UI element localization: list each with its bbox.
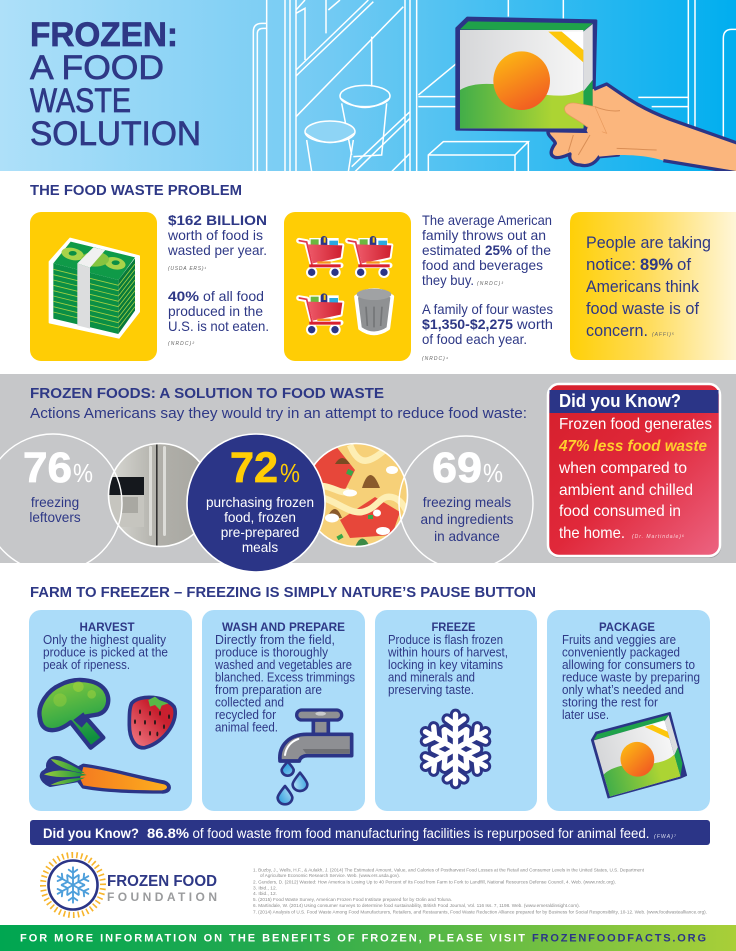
heading: farm to freezer: FARM TO FREEZER – FREEZING IS SIMPLY NATURE’S PAUSE BUTTON <box>30 585 536 601</box>
panel: wash and prepare: WASH AND PREPARE <box>222 620 345 634</box>
icon: stack of money <box>49 238 139 338</box>
text block: 162 billion: 40% <box>168 289 199 304</box>
text block: average American family <box>422 213 553 362</box>
panel: people are taking notice: Americans think <box>586 278 700 296</box>
stat: 69 percent: and ingredients <box>421 512 514 527</box>
footnotes: 5. (2015) Food Waste Survey, American Frozen Food Institute prepared for by Oolin and Toluna. <box>253 897 452 902</box>
footnotes: 6. Martindale, W. (2014) Using consumer surveys to determine food sustainability, British Food Journal, Vol. 116 Iss. 7, 1198. Web. (www.emeraldinsight.com). <box>253 903 580 908</box>
panel: freeze: Produce is flash frozen <box>388 633 503 647</box>
logo: frozen food foundation: FOUNDATION <box>107 890 217 904</box>
text block: 162 billion: worth of food is <box>167 228 263 243</box>
icon: trash can <box>356 289 392 333</box>
text block: 162 billion: wasted per year. <box>167 243 267 258</box>
callout: did you know 47 percent: food consumed in <box>559 503 681 520</box>
panel: people are taking notice: (AFFI)⁵ <box>652 332 674 338</box>
panel: frozen foods solution band <box>0 374 736 572</box>
panel: harvest: produce is picked at the <box>43 646 168 660</box>
callout: did you know 47 percent <box>548 384 721 558</box>
callout: did you know 86.8 percent: 86.8% <box>147 826 189 841</box>
callout: did you know 47 percent: when compared to <box>558 460 687 477</box>
panel: money stack <box>30 212 157 361</box>
text block: average American family: of food each year. <box>422 332 527 347</box>
callout: did you know 47 percent: ambient and chilled <box>559 482 693 499</box>
callout: did you know 47 percent: (Dr. Martindale)⁶ <box>632 534 684 540</box>
footnotes: 3. Ibid., 12. <box>253 886 277 890</box>
panel: wash and prepare: from preparation are <box>215 683 322 697</box>
text block: 162 billion: produced in the <box>168 304 263 319</box>
panel: shopping carts and trash can <box>284 212 411 361</box>
panel: harvest: HARVEST <box>80 620 135 634</box>
text block: 162 billion: (NRDC)² <box>168 341 194 347</box>
header banner <box>0 0 736 173</box>
stat: 69 percent: % <box>483 458 503 488</box>
panel: package: PACKAGE <box>599 620 655 634</box>
text block: average American family: A family of four wastes <box>422 302 553 317</box>
panel: harvest: Only the highest quality <box>43 633 167 647</box>
panel: wash and prepare: collected and <box>215 696 284 710</box>
text block: average American family: worth <box>516 317 553 332</box>
text block: 162 billion: U.S. is not eaten. <box>168 319 269 334</box>
callout: did you know 47 percent: the home. <box>559 525 625 542</box>
stat: 72 percent: 72 <box>230 444 278 492</box>
panel: harvest <box>29 610 192 811</box>
text block: 162 billion: (USDA ERS)¹ <box>168 266 206 272</box>
stat: 69 percent: in advance <box>434 529 500 544</box>
callout: did you know 86.8 percent: (FWA)⁷ <box>654 834 676 840</box>
panel: people are taking notice: notice: <box>586 256 636 274</box>
text block: average American family: of the <box>516 243 551 258</box>
image: refrigerator circle <box>108 442 200 548</box>
panel: freeze: FREEZE <box>432 620 476 634</box>
callout: did you know 47 percent: Did you Know? <box>559 391 681 411</box>
footnotes: 2. Gunders, D. (2012) Wasted: How America Is Losing Up to 40 Percent of Its Food from Farm to Fork to Landfill, National Resources Defense Council, 4. Web. (www.nrdc.org). <box>253 880 616 884</box>
panel: people are taking notice: concern. <box>586 322 648 340</box>
footnotes <box>253 868 707 914</box>
callout: did you know 86.8 percent: of food waste from food manufacturing facilities is repurposed for animal feed. <box>192 826 650 841</box>
panel: package: Fruits and veggies are <box>562 633 676 647</box>
heading: the food waste problem: THE FOOD WASTE PROBLEM <box>30 183 242 199</box>
icon: faucet with drops <box>278 712 352 804</box>
panel: wash and prepare <box>202 610 365 811</box>
freezer line illustration <box>253 0 736 172</box>
icon: broccoli <box>39 680 108 748</box>
callout: did you know 47 percent: 47% less food waste <box>558 438 707 455</box>
stat: 72 percent: food, frozen <box>224 510 296 525</box>
icon: carrot <box>42 758 169 792</box>
stat: 76 percent: 76 <box>23 444 72 492</box>
text block: average American family: food and beverages <box>422 258 543 273</box>
product box and hand <box>457 18 736 173</box>
stat: 72 percent: purchasing frozen <box>206 495 314 510</box>
panel: wash and prepare: blanched. Excess trimmings <box>215 670 355 684</box>
text block: 162 billion: of all food <box>203 289 264 304</box>
panel: harvest: peak of ripeness. <box>43 658 130 672</box>
panel: people are taking notice: 89% <box>640 256 673 274</box>
stat: 76 percent: leftovers <box>29 510 81 525</box>
stat: 72 percent: % <box>280 458 300 488</box>
text block: average American family: 25% <box>485 243 512 258</box>
footnotes: of Agriculture Economic Research Service. Web. (www.ers.usda.gov). <box>260 873 400 878</box>
panel: wash and prepare: animal feed. <box>215 720 278 734</box>
stat: 69 percent: freezing meals <box>423 495 511 510</box>
text block: average American family: (NRDC)³ <box>477 281 503 287</box>
title: WASTE <box>30 82 131 120</box>
panel: wash and prepare: produce is thoroughly <box>215 646 329 660</box>
title: FROZEN: <box>30 16 178 54</box>
footer banner: FOR MORE INFORMATION ON THE BENEFITS OF FROZEN, PLEASE VISIT <box>20 932 525 944</box>
text block: average American family: The average American <box>422 213 552 228</box>
stat: 72 percent: pre-prepared <box>221 525 299 540</box>
text block: 162 billion: $162 BILLION <box>168 213 267 228</box>
panel: package: conveniently packaged <box>562 646 680 660</box>
logo sun and snowflake <box>43 855 103 915</box>
text block: average American family: they buy. <box>422 273 474 288</box>
panel: wash and prepare: Directly from the field, <box>215 633 335 647</box>
title: A FOOD <box>30 49 164 87</box>
stat: 69 percent <box>399 436 533 570</box>
footer banner: FROZENFOODFACTS.ORG <box>532 932 706 944</box>
callout: did you know 86.8 percent <box>30 820 710 845</box>
title <box>30 16 201 153</box>
subheading: Actions Americans say they would try in an attempt to reduce food waste: <box>30 406 527 422</box>
footnotes: 7. (2014) Analysis of U.S. Food Waste Among Food Manufacturers, Retailers, and Restaurants, Food Waste Reduction Alliance prepared for by Business for Social Responsibility, 10-12. Web. (www.foodwastealliance.org). <box>253 910 707 914</box>
logo: frozen food foundation: FROZEN FOOD <box>107 873 217 890</box>
panel: people are taking notice: of <box>677 256 691 274</box>
panel: freeze: preserving taste. <box>388 683 474 697</box>
stat: 69 percent: 69 <box>432 444 482 492</box>
title: SOLUTION <box>30 115 201 153</box>
footnotes: 1. Buzby, J., Wells, H.F., & Aulakh, J. (2014) The Estimated Amount, Value, and Calories of Postharvest Food Losses at the Retail and Consumer Levels in the United States, U.S. Department <box>253 868 645 872</box>
text block: average American family: family throws out an <box>422 228 546 243</box>
stat: 72 percent: meals <box>242 540 278 555</box>
icon: frozen food package <box>590 711 688 798</box>
panel: freeze: locking in key vitamins <box>388 658 503 672</box>
stat: 76 percent: freezing <box>31 495 79 510</box>
panel: freeze: within hours of harvest, <box>387 646 508 660</box>
footnotes: 4. Ibid., 12. <box>253 891 277 896</box>
panel: people are taking notice: food waste is of <box>586 300 699 318</box>
panel: package: only what’s needed and <box>562 683 684 697</box>
panel: people are taking notice: People are taking <box>586 234 711 252</box>
footer banner <box>0 925 736 951</box>
icon: snowflake <box>420 714 491 784</box>
stat: 76 percent <box>0 434 122 572</box>
panel: freeze: and minerals and <box>388 670 475 684</box>
callout: did you know 47 percent: Frozen food generates <box>559 416 712 433</box>
panel: freeze <box>375 610 537 811</box>
icon: strawberry <box>129 697 175 748</box>
panel: people are taking notice <box>570 212 736 360</box>
stat: 72 percent <box>187 434 325 572</box>
logo: frozen food foundation <box>43 855 217 915</box>
panel: package: allowing for consumers to <box>562 658 695 672</box>
panel: package <box>547 610 710 811</box>
panel: wash and prepare: recycled for <box>215 708 276 722</box>
text block: average American family: (NRDC)⁴ <box>422 356 448 362</box>
panel: package: later use. <box>562 708 609 722</box>
text block: 162 billion <box>167 213 269 347</box>
text block: average American family: estimated <box>422 243 481 258</box>
stat: 76 percent: % <box>73 458 93 488</box>
panel: package: storing the rest for <box>562 696 658 710</box>
panel: package: reduce waste by preparing <box>562 670 700 684</box>
panel: wash and prepare: washed and vegetables are <box>214 658 352 672</box>
callout: did you know 86.8 percent: Did you Know? <box>43 826 139 841</box>
image: pizza circle <box>314 442 408 548</box>
heading: frozen foods: FROZEN FOODS: A SOLUTION TO FOOD WASTE <box>30 386 384 402</box>
text block: average American family: $1,350-$2,275 <box>422 317 513 332</box>
